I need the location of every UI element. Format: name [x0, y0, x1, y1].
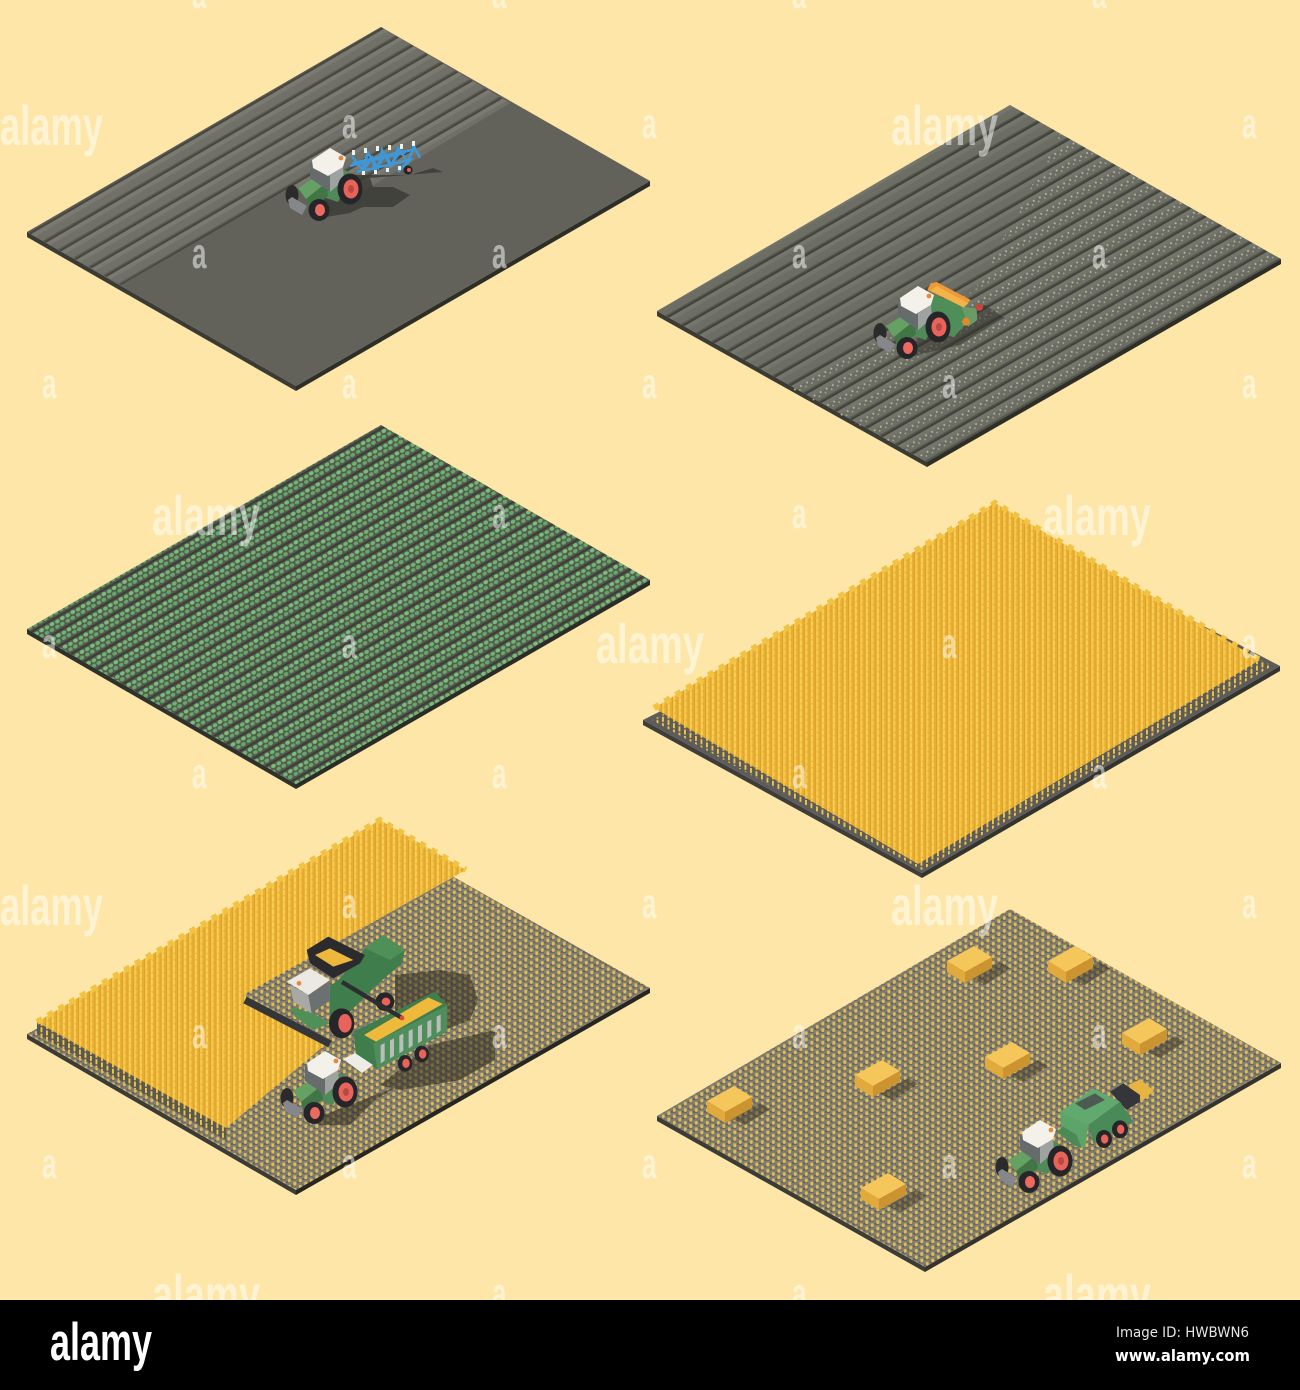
watermark: alamy [0, 95, 103, 157]
watermark: a [42, 619, 57, 668]
hay bale 4 [985, 1042, 1030, 1079]
field 6 ground [657, 1063, 1281, 1272]
watermark: a [1092, 229, 1107, 278]
watermark: a [492, 1269, 507, 1318]
panel: baling field [657, 909, 1281, 1272]
hay bale shadows [732, 962, 1185, 1212]
watermark: a [192, 229, 207, 278]
watermark: a [42, 1139, 57, 1188]
watermark: a [792, 749, 807, 798]
watermark: a [1242, 99, 1257, 148]
tractor 4 [996, 1120, 1072, 1193]
watermark: a [792, 1009, 807, 1058]
field 6 stubble [657, 909, 1281, 1267]
tractor shadow [320, 168, 443, 218]
field 4 ground [643, 530, 1280, 878]
watermark: a [342, 619, 357, 668]
website: www.alamy.com [1115, 1346, 1250, 1365]
watermark: a [1242, 359, 1257, 408]
field 2 soil plate [657, 259, 1281, 467]
combine harvester [245, 935, 405, 1044]
watermark: a [192, 1009, 207, 1058]
field 5 jagged top edge [37, 820, 466, 1022]
watermark: a [792, 1269, 807, 1318]
watermark: a [1092, 749, 1107, 798]
watermark: a [492, 489, 507, 538]
grain trailer [353, 992, 447, 1072]
hay bale 6 [707, 1086, 752, 1123]
watermark: alamy [152, 485, 260, 547]
tractor 3 [280, 1051, 358, 1124]
field 5 ground [27, 988, 650, 1195]
panel: harvesting field [27, 820, 650, 1195]
watermark: alamy [596, 613, 704, 675]
field 2 furrows [657, 105, 1281, 462]
tractor 2 [874, 286, 950, 359]
watermark: a [642, 879, 657, 928]
watermark: a [342, 879, 357, 928]
watermark: alamy [1043, 1264, 1151, 1326]
watermark: a [342, 1139, 357, 1188]
watermark: a [192, 749, 207, 798]
field 4 jagged top edge [654, 503, 1260, 708]
watermark: a [1092, 1009, 1107, 1058]
footer logo: alamy [50, 1314, 152, 1372]
watermark: alamy [891, 95, 998, 157]
panel: ploughing field [27, 27, 650, 391]
field 1 ploughed furrows [27, 27, 510, 285]
seeder shadow [905, 305, 1005, 358]
field 4 wheat heads [654, 503, 1260, 864]
watermark: a [42, 359, 57, 408]
hay bale 3 [1122, 1018, 1167, 1055]
watermark: a [642, 359, 657, 408]
watermark: a [942, 1139, 957, 1188]
field 3 plant rows [27, 425, 650, 784]
watermark: a [1242, 619, 1257, 668]
watermark: a [792, 489, 807, 538]
watermark: a [642, 99, 657, 148]
orange seed drill [924, 282, 983, 337]
hay bale 1 [947, 946, 992, 983]
hay bale 2 [1048, 946, 1093, 983]
blue plough [350, 141, 420, 175]
watermark: a [492, 229, 507, 278]
field 3 soil plate [27, 580, 650, 789]
field 2 seed dots [790, 134, 1281, 462]
watermark: alamy [152, 1264, 260, 1326]
hay bale 5 [855, 1060, 900, 1097]
watermark: a [792, 229, 807, 278]
combine unloading auger [342, 982, 404, 1020]
tractor hitch [343, 1053, 373, 1073]
field 4 stems [652, 530, 1272, 870]
watermark: alamy [891, 875, 998, 937]
footer bar [0, 1300, 1300, 1390]
watermark: alamy [1043, 485, 1151, 547]
machine shadows [310, 970, 495, 1125]
field 5 wheat stems at cut edge [37, 1022, 226, 1140]
watermark: a [492, 1009, 507, 1058]
watermark: a [342, 99, 357, 148]
field 1 soil plate [27, 27, 650, 391]
watermark: a [642, 1139, 657, 1188]
watermark: a [942, 359, 957, 408]
watermark: a [342, 359, 357, 408]
watermark: a [942, 619, 957, 668]
panel: sowing field [657, 105, 1281, 467]
field 5 stems texture [37, 1022, 226, 1140]
panel: ripe wheat field [643, 503, 1280, 878]
hay bale 7 [861, 1173, 906, 1210]
watermark: a [1242, 879, 1257, 928]
panel: young crop field [27, 425, 650, 789]
tractor 1 [286, 148, 362, 221]
watermark: a [1242, 1139, 1257, 1188]
baler [1057, 1079, 1154, 1148]
field 5 standing wheat [37, 820, 466, 1128]
image id: Image ID: HWBWN6 [1116, 1325, 1249, 1341]
field 5 stubble [27, 838, 650, 1190]
watermark: alamy [0, 875, 103, 937]
watermark: a [492, 749, 507, 798]
